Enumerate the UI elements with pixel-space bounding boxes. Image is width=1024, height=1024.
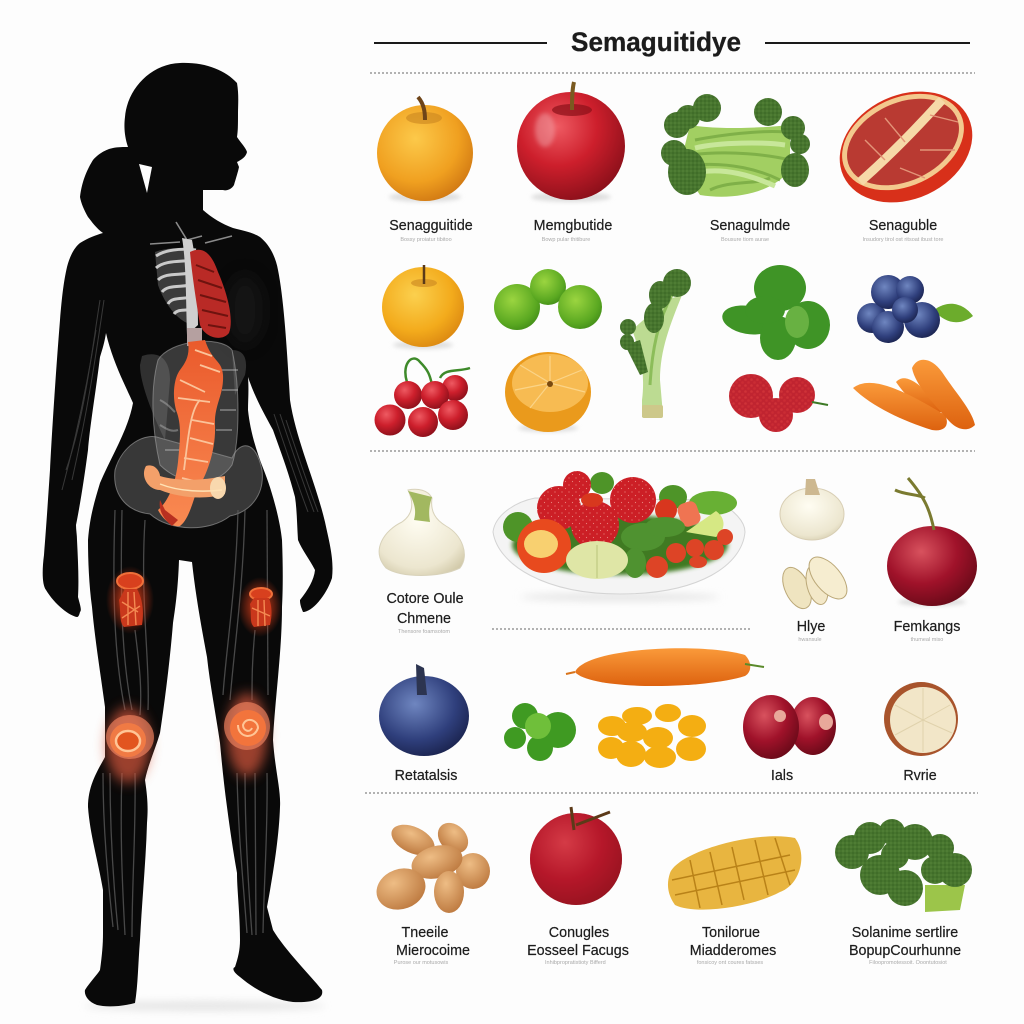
pelvis translucent: [115, 437, 262, 528]
food: almonds/nuts with label: Purose our motusowis: [394, 960, 448, 966]
food: garlic with label: [379, 489, 464, 635]
food: broccoli stalk: [620, 269, 691, 418]
abdomen translucent bowel: [153, 341, 238, 482]
neck and clavicle: [150, 222, 232, 244]
food: apple with twig and label: [887, 478, 977, 643]
food: blueberries: [857, 275, 973, 343]
food: dark plum with label: [379, 664, 469, 784]
food: garlic with label: Thensore foamsotom: [398, 629, 450, 635]
knee glow right: [224, 693, 270, 777]
food: apple with twig and label: Femkangs: [894, 619, 960, 635]
food: cut pomegranate: Insudory tirol ost ritsoat ibust tore: [862, 237, 944, 243]
title with side rules: Semaguitidye: [571, 27, 741, 57]
food: cut pomegranate: Senaguble: [869, 218, 937, 234]
food: garlic cloves with label: Hlye: [797, 619, 825, 635]
food: cut pomegranate: [821, 71, 991, 243]
floor shadow: [85, 1001, 325, 1011]
food: garlic cloves with label: hwansule: [798, 637, 822, 643]
food: orange apple: Senagguitide: [389, 218, 473, 234]
knee glow left: [106, 707, 154, 783]
food: broccoli head with label: Filoopromotessoit. Ooontutosiot: [869, 960, 947, 966]
food: raspberries: [729, 374, 828, 432]
food: yellow apple: [382, 265, 464, 349]
food: red apple: [517, 82, 625, 243]
food: dark plum with label: Retatalsis: [395, 768, 457, 784]
food: garlic with label: Cotore Oule: [386, 591, 464, 607]
esophagus: [187, 328, 202, 346]
thigh glow left: [106, 566, 154, 634]
food: broccoli: Bousure tiom aurae: [721, 237, 769, 243]
food: garlic with label: Chmene: [397, 611, 451, 627]
food: red apple with label: [527, 807, 629, 966]
food: red apple with label: Conugles: [549, 925, 609, 941]
food: corn with label: Miadderomes: [690, 943, 776, 959]
food: red cherries with label: [743, 695, 836, 784]
food: carrots: [853, 360, 975, 430]
food: cut round with label: Rvrie: [903, 768, 937, 784]
food: broccoli head with label: [835, 819, 972, 966]
pelvic organ (orange tube): [144, 465, 226, 499]
figure: human silhouette with translucent organs: [43, 63, 333, 1011]
food: red apple: Bowp pular thitibure: [542, 237, 590, 243]
food: orange apple: Bossy proiatur tibitoo: [400, 237, 452, 243]
food: broccoli head with label: Solanime sertlire: [852, 925, 958, 941]
silhouette body: [43, 63, 333, 1006]
side pouch translucent: [140, 350, 246, 440]
food: corn with label: fonsicoy ont coures fatsses: [697, 960, 763, 966]
food: salad bowl: [493, 471, 745, 601]
food: corn with label: [668, 836, 801, 966]
food: long carrot: [566, 648, 764, 686]
rib cage: [155, 238, 198, 335]
food: almonds/nuts with label: [371, 817, 490, 966]
arm muscle lines: [62, 300, 318, 512]
food: red apple: Memgbutide: [534, 218, 612, 234]
food: garlic cloves with label: [777, 550, 854, 643]
food: red apple with label: Eosseel Facugs: [527, 943, 629, 959]
chest shading: [227, 275, 263, 345]
food: broccoli head with label: BopupCourhunne: [849, 943, 961, 959]
food: red cherries with label: Ials: [771, 768, 793, 784]
food: red apple with label: Inhibpropratistioty Bifferd: [545, 960, 606, 966]
food: green leaf cluster: [504, 703, 576, 761]
stomach and intestine: [158, 340, 223, 526]
food: yellow beans: [598, 704, 706, 768]
food: broccoli: Senagulmde: [710, 218, 790, 234]
thigh glow right: [238, 577, 282, 637]
food: almonds/nuts with label: Tneeile: [402, 925, 448, 941]
food: garlic bulb: [780, 479, 844, 540]
leg bones translucent: [103, 510, 268, 937]
food: broccoli: [661, 94, 810, 243]
food: orange apple: [377, 97, 473, 243]
lung: [190, 250, 231, 338]
food: cut round with label: [884, 682, 958, 784]
food: spinach leaves: [720, 265, 830, 360]
food: limes: [494, 269, 602, 330]
food: corn with label: Tonilorue: [702, 925, 760, 941]
food: cherry tomatoes: [374, 359, 470, 437]
food: apple with twig and label: thumeal miso: [911, 637, 943, 643]
food: almonds/nuts with label: Mierocoime: [396, 943, 470, 959]
food: orange half: [505, 352, 591, 432]
